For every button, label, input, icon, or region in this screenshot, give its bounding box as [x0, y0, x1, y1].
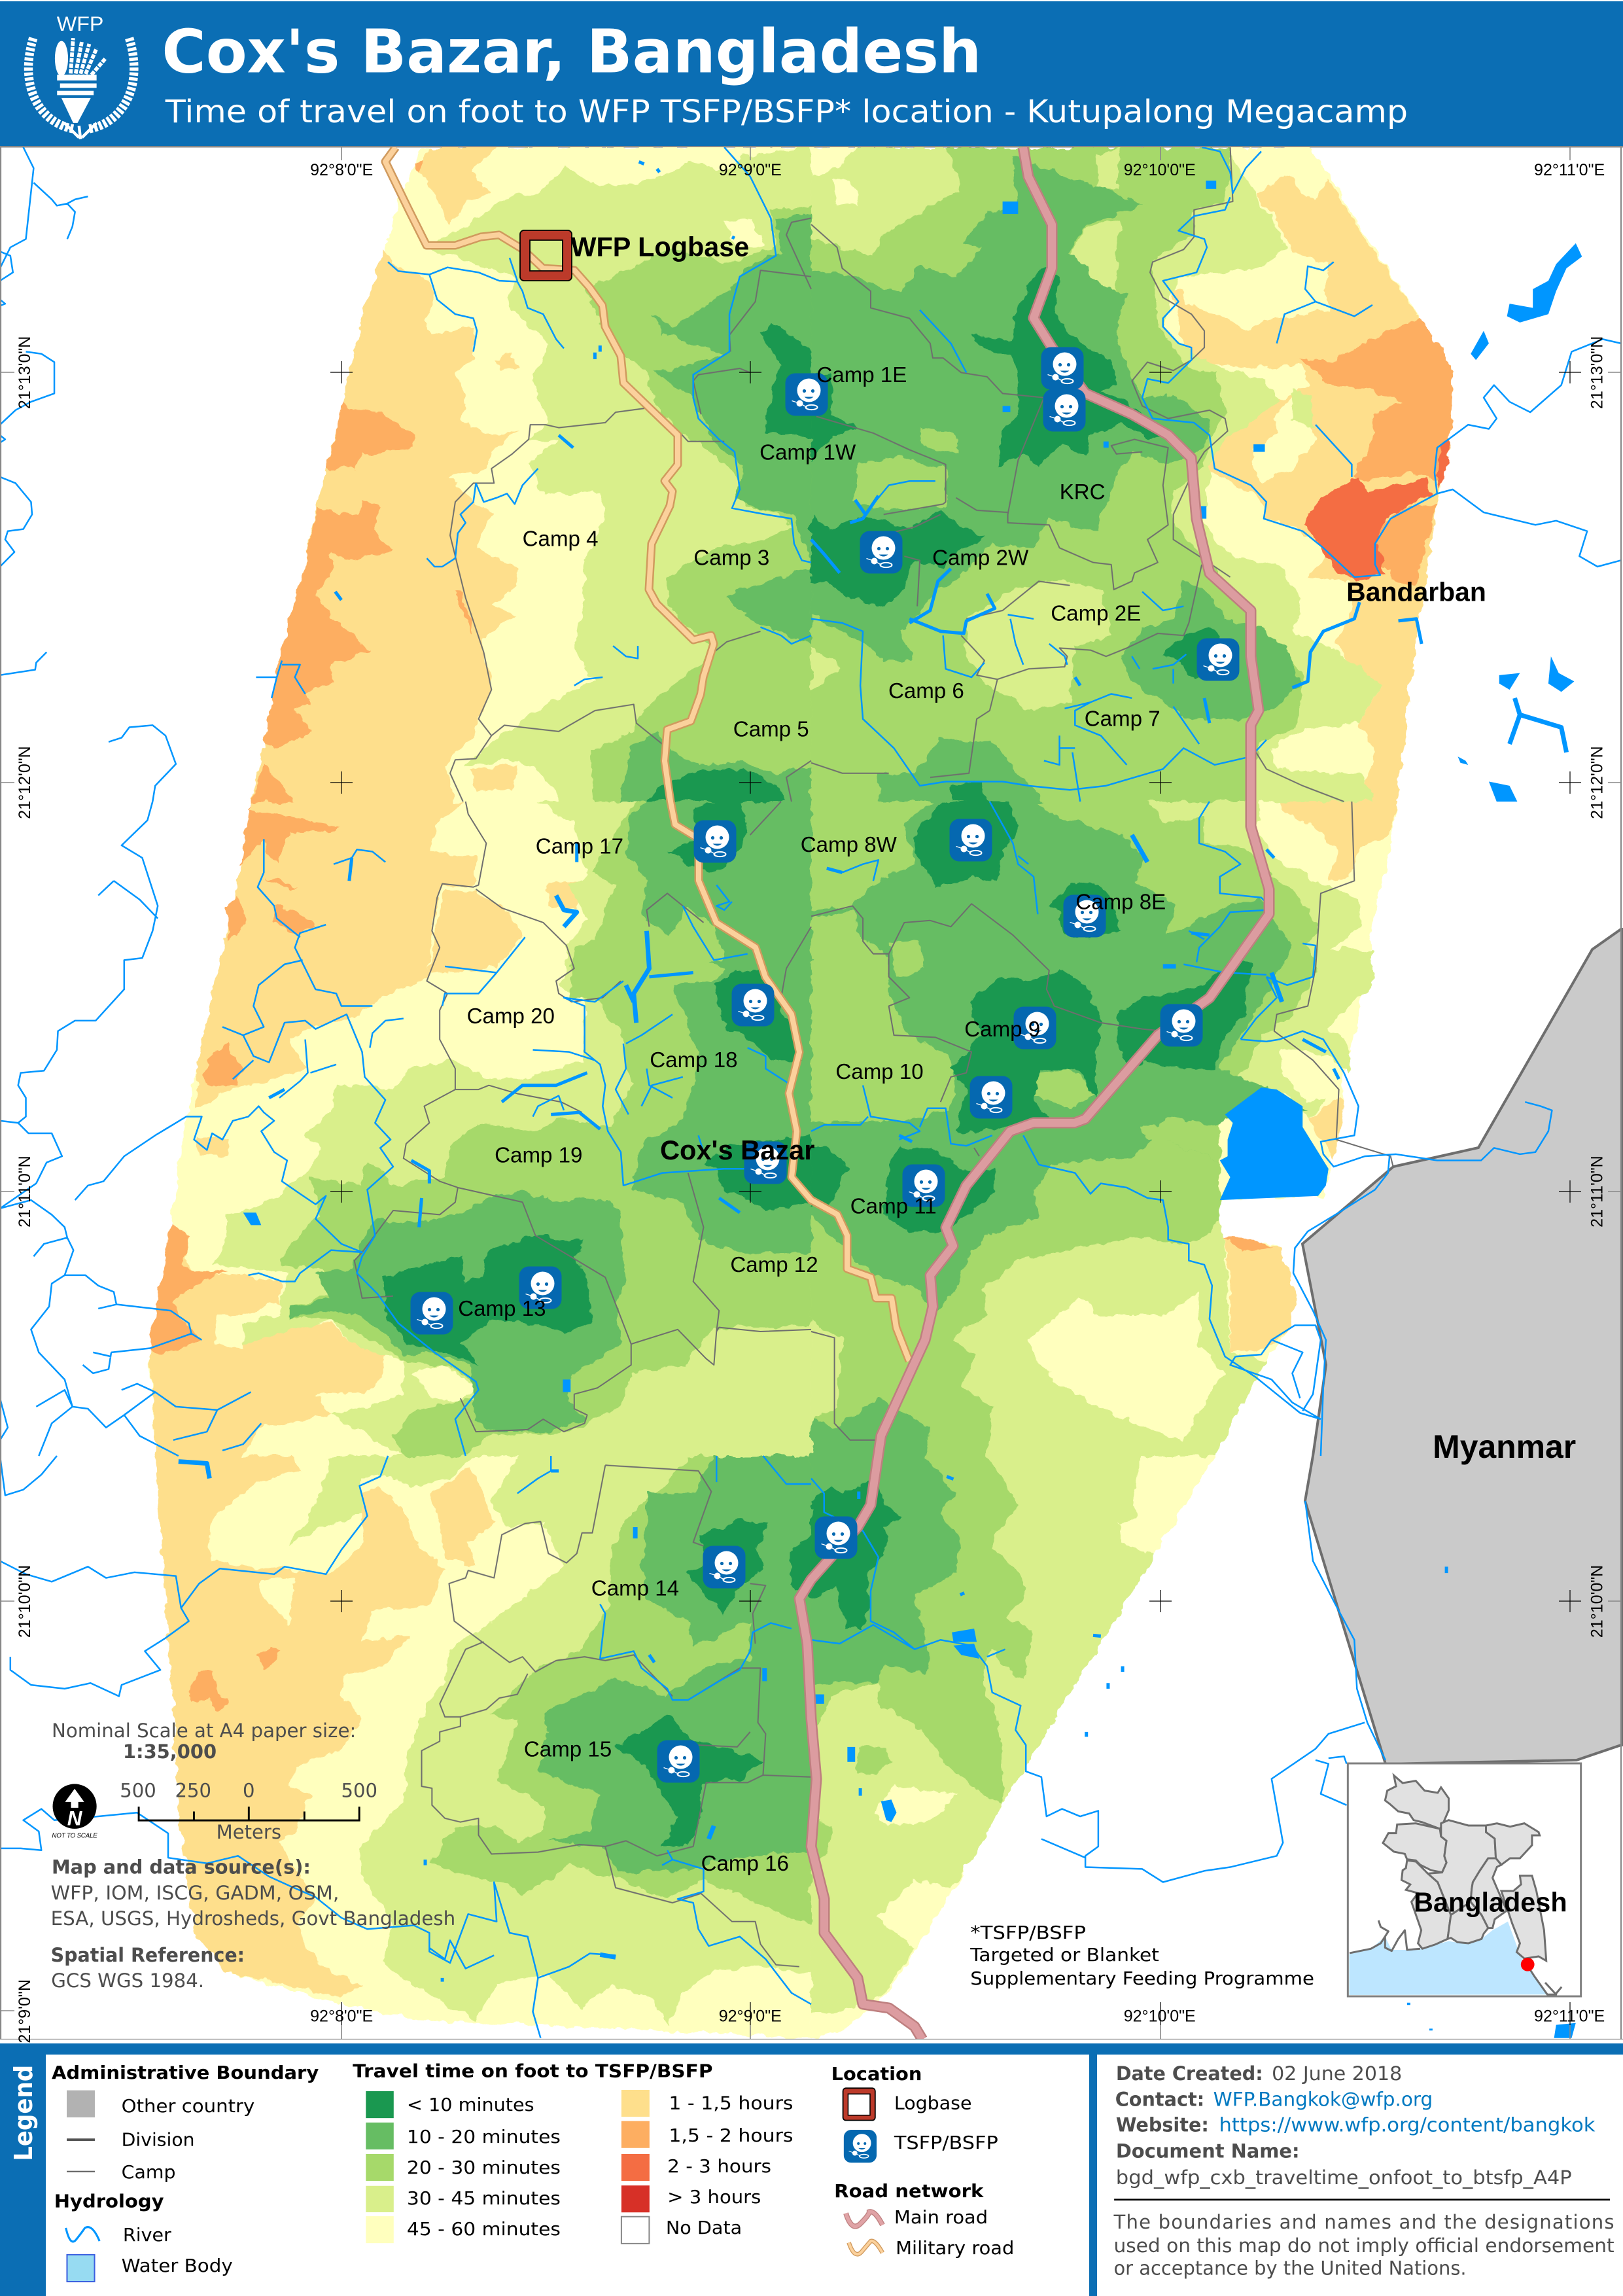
map labels: Camp 2E [1051, 602, 1141, 626]
longitude and latitude labels: 92°8'0"E [310, 161, 373, 179]
info panel: bgd_wfp_cxb_traveltime_onfoot_to_btsfp_A4P [1116, 2166, 1572, 2189]
info panel: Document Name: [1116, 2140, 1300, 2163]
map labels: Camp 9 [964, 1017, 1040, 1042]
longitude and latitude labels: 21°11'0"N [16, 1156, 34, 1227]
longitude and latitude labels: 21°10'0"N [1588, 1565, 1607, 1638]
map labels: Camp 19 [495, 1143, 582, 1167]
legend: travel time: 2 - 3 hours [667, 2156, 771, 2177]
legend: travel time: No Data [666, 2217, 742, 2238]
legend and info bars [0, 2043, 1623, 2296]
info panel: or acceptance by the United Nations. [1113, 2257, 1467, 2280]
legend: hydrology: Water Body [122, 2255, 233, 2276]
travel time zones [149, 147, 1453, 2038]
scale bar: 500 [341, 1779, 377, 1801]
sources text [51, 1856, 455, 1992]
scale bar: 250 [175, 1779, 211, 1801]
icon: north arrow [52, 1784, 97, 1839]
legend: location [831, 2063, 998, 2163]
scale bar [120, 1779, 377, 1843]
legend: hydrology: River [123, 2225, 171, 2246]
map labels: Camp 15 [524, 1738, 612, 1762]
legend: travel time: 1,5 - 2 hours [669, 2125, 794, 2146]
map labels: Camp 12 [730, 1253, 818, 1277]
longitude and latitude labels: 92°11'0"E [1534, 161, 1605, 179]
map labels: Camp 10 [835, 1060, 924, 1084]
info panel: Website: [1116, 2113, 1209, 2136]
map labels [458, 232, 1576, 1918]
header banner [0, 1, 1623, 148]
legend: road network: Road network [834, 2180, 985, 2202]
scale text: Nominal Scale at A4 paper size: [52, 1720, 356, 1742]
military road [385, 147, 909, 1361]
scale bar: Meters [217, 1821, 281, 1843]
longitude and latitude labels: 21°9'0"N [16, 1979, 34, 2043]
camp boundaries [355, 147, 1393, 1967]
location marker [1521, 1958, 1535, 1971]
legend heading: Legend [9, 2065, 38, 2161]
TSFP note: Targeted or Blanket [969, 1945, 1159, 1966]
longitude and latitude labels: 92°8'0"E [310, 2007, 373, 2026]
map labels: Bangladesh [1414, 1888, 1567, 1918]
info panel: 02 June 2018 [1272, 2062, 1402, 2085]
map labels: Camp 3 [693, 546, 769, 571]
longitude and latitude labels: 21°10'0"N [16, 1565, 34, 1638]
longitude and latitude labels: 21°13'0"N [1588, 336, 1607, 409]
legend: travel time [353, 2060, 794, 2244]
zones south-west [155, 1456, 811, 2038]
scale text [52, 1720, 356, 1763]
scale bar: 500 [120, 1779, 156, 1801]
map labels: Camp 1W [759, 440, 856, 465]
TSFP/BSFP location icons [411, 347, 1239, 1782]
legend: location: Location [831, 2063, 922, 2085]
zones south-east [811, 1456, 1215, 2038]
legend: travel time: 20 - 30 minutes [407, 2157, 561, 2178]
map labels: Camp 5 [733, 717, 809, 741]
icon: WFP Logbase marker [520, 230, 572, 281]
map labels: Camp 4 [523, 527, 599, 551]
subtitle: Time of travel on foot to WFP TSFP/BSFP* location - Kutupalong Megacamp [165, 94, 1408, 130]
longitude and latitude labels: 21°11'0"N [1588, 1156, 1607, 1227]
longitude and latitude labels: 92°11'0"E [1534, 2007, 1605, 2026]
map labels: Camp 8W [801, 833, 898, 857]
main road [799, 147, 1269, 2040]
sources text: Spatial Reference: [51, 1944, 245, 1966]
map labels: Camp 7 [1085, 707, 1161, 732]
longitude and latitude labels: 21°13'0"N [16, 336, 34, 409]
map labels: Camp 14 [591, 1576, 679, 1600]
info panel: The boundaries and names and the designations [1113, 2211, 1614, 2233]
map labels: Camp 13 [458, 1297, 546, 1321]
longitude and latitude labels: 21°12'0"N [1588, 746, 1607, 819]
legend: travel time: 45 - 60 minutes [407, 2219, 561, 2240]
legend: road network [834, 2180, 1014, 2259]
legend: administrative boundary: Other country [122, 2096, 254, 2117]
zones middle-west [149, 802, 811, 1456]
map labels: Camp 2W [932, 546, 1029, 571]
legend: travel time: 1 - 1,5 hours [669, 2093, 794, 2114]
legend: road network: Military road [896, 2238, 1014, 2259]
legend: administrative boundary: Administrative Boundary [52, 2062, 319, 2083]
longitude and latitude labels: 92°10'0"E [1124, 2007, 1196, 2026]
longitude and latitude labels: 92°9'0"E [719, 161, 782, 179]
TSFP note [969, 1922, 1314, 1989]
scale text: 1:35,000 [123, 1740, 217, 1763]
map labels: Camp 18 [650, 1048, 738, 1072]
scale bar: 0 [243, 1779, 255, 1801]
sea in inset [1349, 1922, 1546, 1995]
info panel: https://www.wfp.org/content/bangkok [1219, 2113, 1596, 2136]
info panel: WFP.Bangkok@wfp.org [1213, 2088, 1433, 2110]
map labels: Camp 1E [816, 363, 907, 387]
legend: travel time: > 3 hours [667, 2187, 761, 2208]
longitude and latitude labels: 21°12'0"N [16, 746, 34, 819]
legend: travel time: < 10 minutes [407, 2094, 534, 2115]
map labels: Camp 17 [536, 834, 623, 858]
sources text: ESA, USGS, Hydrosheds, Govt Bangladesh [51, 1907, 455, 1930]
sources text: WFP, IOM, ISCG, GADM, OSM, [51, 1882, 339, 1904]
info panel: used on this map do not imply official endorsement [1113, 2234, 1614, 2257]
WFP logo [28, 12, 134, 139]
map labels: Camp 8E [1075, 890, 1166, 914]
map labels: Myanmar [1433, 1428, 1576, 1465]
map labels: Camp 20 [467, 1004, 555, 1029]
legend: travel time: Travel time on foot to TSFP/BSFP [353, 2060, 712, 2082]
longitude and latitude labels: 92°10'0"E [1124, 161, 1196, 179]
legend: administrative boundary [52, 2062, 319, 2183]
zones north-east [811, 147, 1453, 802]
legend: administrative boundary: Division [122, 2130, 195, 2151]
map labels: WFP Logbase [570, 232, 749, 262]
legend: location: TSFP/BSFP [894, 2132, 998, 2153]
legend: travel time: 10 - 20 minutes [407, 2127, 561, 2147]
Bangladesh divisions [1383, 1775, 1546, 1961]
legend: hydrology [54, 2191, 233, 2282]
zones north-west [251, 147, 811, 802]
icon: north arrow: N [67, 1807, 83, 1830]
title: Cox's Bazar, Bangladesh [162, 16, 981, 86]
longitude and latitude labels: 92°9'0"E [719, 2007, 782, 2026]
map labels: Camp 6 [888, 679, 964, 703]
TSFP note: *TSFP/BSFP [970, 1922, 1086, 1943]
sources text: Map and data source(s): [52, 1856, 311, 1879]
WFP logo: WFP [57, 12, 103, 35]
map labels: Bandarban [1346, 576, 1486, 607]
legend: location: Logbase [894, 2093, 971, 2114]
sources text: GCS WGS 1984. [51, 1969, 204, 1992]
icon: north arrow: NOT TO SCALE [52, 1832, 97, 1839]
map labels: Camp 16 [701, 1852, 789, 1876]
legend: administrative boundary: Camp [122, 2162, 175, 2183]
info panel: Date Created: [1116, 2062, 1263, 2085]
map labels: Camp 11 [850, 1195, 937, 1219]
zones middle-east [811, 802, 1399, 1456]
info panel: Contact: [1115, 2088, 1204, 2110]
locator inset map [1348, 1763, 1581, 1996]
map labels: KRC [1060, 480, 1106, 504]
Myanmar country area [1302, 929, 1623, 1764]
TSFP note: Supplementary Feeding Programme [970, 1968, 1314, 1989]
legend: hydrology: Hydrology [54, 2191, 164, 2212]
legend: road network: Main road [894, 2207, 988, 2228]
map labels: Cox's Bazar [660, 1135, 815, 1165]
info panel [1113, 2062, 1614, 2280]
legend: travel time: 30 - 45 minutes [407, 2188, 561, 2209]
